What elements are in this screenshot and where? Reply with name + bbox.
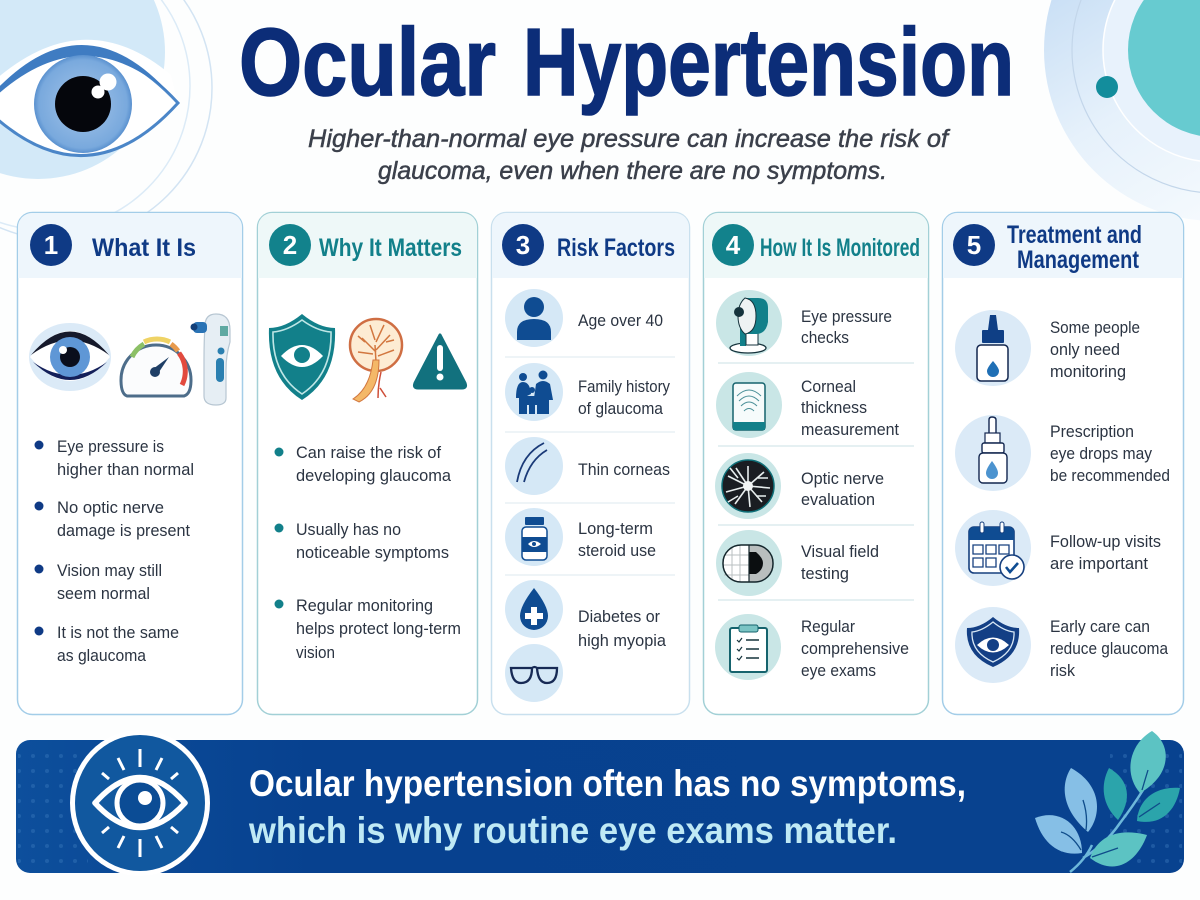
subtitle: glaucoma, even when there are no symptoms. [378, 157, 887, 185]
heading: Why It Matters [319, 234, 462, 262]
monitoring labels: Regular [801, 617, 855, 636]
bullet list: vision [296, 643, 335, 662]
icon: main eye [0, 45, 178, 156]
card [492, 212, 690, 714]
icon: person [505, 289, 563, 347]
callout text: Ocular hypertension often has no symptoms, [249, 763, 966, 804]
risk factor labels: high myopia [578, 631, 667, 650]
heading: What It Is [92, 234, 196, 262]
icon: eye drop bottle [955, 310, 1031, 386]
panel 4: how it is monitored [704, 212, 928, 714]
panel 2: why it matters [258, 212, 478, 714]
icon: tonometer machine [716, 290, 782, 356]
bullet list: Vision may still [57, 561, 162, 580]
card [704, 212, 928, 714]
monitoring labels: evaluation [801, 490, 875, 509]
card [18, 212, 242, 714]
bullet list [34, 437, 194, 665]
number badge: 5 [967, 230, 981, 260]
bullet list: seem normal [57, 584, 150, 603]
treatment labels [1050, 318, 1170, 680]
header band [18, 213, 242, 278]
heading: How It Is Monitored [760, 234, 920, 262]
subtitle: Higher-than-normal eye pressure can increase the risk of [308, 125, 951, 153]
icon: family [505, 363, 563, 421]
monitoring labels [801, 307, 909, 680]
callout text [248, 763, 966, 851]
bullet list: developing glaucoma [296, 466, 452, 485]
icon: calendar check [955, 510, 1031, 586]
decoration: top-right circles [1044, 0, 1200, 221]
treatment labels: be recommended [1050, 466, 1170, 485]
header band [704, 213, 928, 278]
header band [258, 213, 477, 278]
risk factor labels: of glaucoma [578, 399, 663, 418]
card [942, 212, 1184, 714]
icon: shield [269, 314, 335, 400]
header band [492, 213, 689, 278]
icon: tablet pachymeter [716, 372, 782, 438]
monitoring labels: measurement [801, 420, 899, 439]
bullet list: Can raise the risk of [296, 443, 441, 462]
bullet list: damage is present [57, 521, 190, 540]
icon: optic nerve scan [715, 453, 781, 519]
icon: optic nerve retina [350, 319, 402, 402]
treatment labels: Follow-up visits [1050, 532, 1161, 551]
risk factor labels: Long-term [578, 519, 653, 538]
number badge [269, 224, 311, 266]
number badge: 1 [44, 230, 58, 260]
icon: clipboard checklist [715, 614, 781, 680]
icon: glasses [505, 644, 563, 702]
bullet list: Regular monitoring [296, 596, 433, 615]
panel 5: treatment and management [942, 212, 1184, 714]
icon: eye shield [955, 607, 1031, 683]
banner background [16, 740, 1184, 873]
callout banner [16, 730, 1184, 876]
header band [943, 213, 1183, 278]
monitoring labels: testing [801, 564, 849, 583]
risk factor labels: Age over 40 [578, 311, 663, 330]
heading: Treatment and [1007, 221, 1142, 249]
heading [1007, 221, 1142, 274]
decoration: top-left eye motif [0, 0, 212, 240]
icon: visual field [716, 530, 782, 596]
icon: medicine bottle [505, 508, 563, 566]
monitoring labels: Eye pressure [801, 307, 892, 326]
heading: Risk Factors [557, 234, 675, 262]
panel 3: risk factors [492, 212, 690, 714]
number badge [30, 224, 72, 266]
treatment labels: risk [1050, 661, 1075, 680]
risk factor labels: steroid use [578, 541, 656, 560]
monitoring labels: eye exams [801, 661, 876, 680]
icon: leaves [1035, 731, 1180, 872]
monitoring labels: Visual field [801, 542, 879, 561]
number badge [502, 224, 544, 266]
panel 1: what it is [18, 212, 242, 714]
number badge: 4 [726, 230, 741, 260]
number badge [712, 224, 754, 266]
treatment labels: Early care can [1050, 617, 1150, 636]
treatment labels: reduce glaucoma [1050, 639, 1168, 658]
bullet list: Eye pressure is [57, 437, 164, 456]
callout text: which is why routine eye exams matter. [248, 810, 897, 851]
bullet list: Usually has no [296, 520, 401, 539]
card [258, 212, 478, 714]
icon: eye [29, 323, 111, 391]
monitoring labels: comprehensive [801, 639, 909, 658]
treatment labels: monitoring [1050, 362, 1126, 381]
monitoring labels: Optic nerve [801, 469, 884, 488]
subtitle [308, 125, 951, 185]
icon: eye emblem [70, 730, 210, 876]
monitoring labels: Corneal [801, 377, 856, 396]
number badge [953, 224, 995, 266]
bullet list [274, 443, 461, 662]
icon: blood drop [505, 580, 563, 638]
risk factor labels [578, 311, 670, 650]
treatment labels: only need [1050, 340, 1120, 359]
bullet list: helps protect long-term [296, 619, 461, 638]
treatment labels: Some people [1050, 318, 1140, 337]
risk factor labels: Family history [578, 377, 670, 396]
icon: warning triangle [414, 335, 466, 388]
risk factor labels: Diabetes or [578, 607, 660, 626]
title: Ocular [239, 9, 496, 116]
icon: prescription drops [955, 415, 1031, 491]
risk factor labels: Thin corneas [578, 460, 670, 479]
treatment labels: Prescription [1050, 422, 1134, 441]
bullet list: noticeable symptoms [296, 543, 449, 562]
treatment labels: eye drops may [1050, 444, 1152, 463]
monitoring labels: thickness [801, 398, 867, 417]
bullet list: No optic nerve [57, 498, 164, 517]
icon: cornea [505, 437, 563, 495]
icon: pressure gauge [121, 339, 191, 396]
icon: tonometer [190, 314, 230, 405]
bullet list: It is not the same [57, 623, 179, 642]
bullet list: higher than normal [57, 460, 194, 479]
title [239, 9, 1014, 116]
title: Hypertension [523, 9, 1014, 116]
treatment labels: are important [1050, 554, 1148, 573]
heading: Management [1017, 246, 1140, 274]
number badge: 3 [516, 230, 530, 260]
number badge: 2 [283, 230, 297, 260]
monitoring labels: checks [801, 328, 849, 347]
bullet list: as glaucoma [57, 646, 147, 665]
